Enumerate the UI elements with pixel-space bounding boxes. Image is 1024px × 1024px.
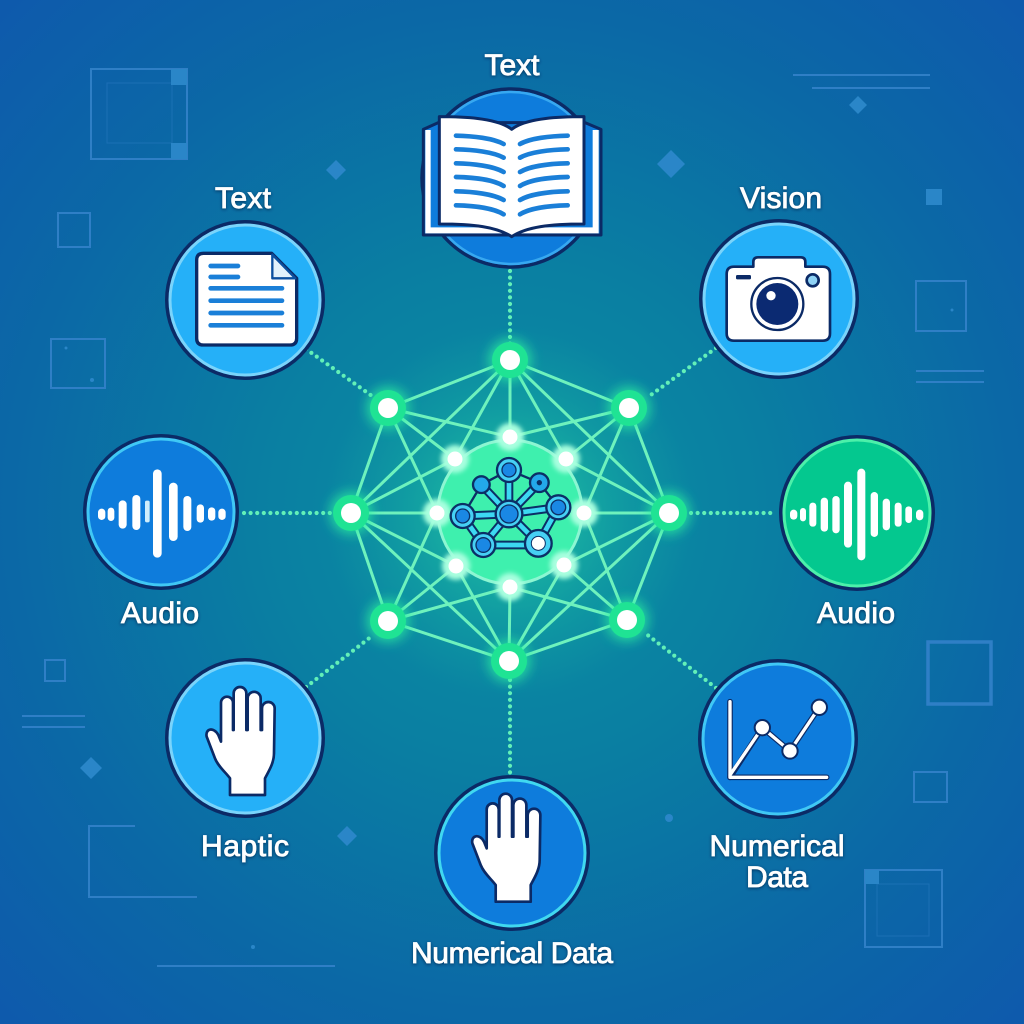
label: left Text: Text: [215, 182, 272, 215]
icon: camera: [727, 257, 830, 341]
icon: left waveform: [98, 469, 226, 558]
outer nodes: [330, 339, 690, 682]
node: vision camera: [701, 221, 857, 377]
label: Numerical Data (two lines): Data: [746, 861, 808, 894]
node: top text (book): [422, 89, 601, 267]
label: top Text: Text: [484, 49, 540, 82]
neural network mesh: [351, 360, 669, 661]
icon: open book: [423, 117, 601, 237]
label: Numerical Data (two lines): Numerical: [710, 830, 844, 863]
label: Haptic: Haptic: [201, 830, 289, 863]
dotted connectors: [244, 271, 776, 775]
label: left Audio: Audio: [121, 597, 199, 630]
central glow: [325, 327, 695, 697]
node: left audio: [85, 436, 237, 588]
icon: line chart: [730, 700, 827, 777]
node: right audio: [781, 437, 933, 589]
icon: document: [197, 253, 297, 345]
inner nodes: [423, 423, 598, 601]
central hub disk: [438, 440, 582, 584]
node: haptic: [167, 660, 323, 816]
node: bottom hand: [436, 777, 588, 929]
label: bottom Numerical Data: Numerical Data: [411, 937, 613, 970]
icon: hand: [206, 687, 275, 795]
label: right Audio: Audio: [817, 597, 895, 630]
icon: right waveform: [790, 469, 923, 560]
icon: central network brain: [451, 458, 570, 557]
label: Numerical Data (two lines): [710, 830, 844, 894]
node: text document: [167, 222, 323, 378]
icon: hand: [472, 794, 540, 902]
node: numerical data chart: [700, 661, 856, 817]
label: Vision: Vision: [740, 182, 822, 215]
